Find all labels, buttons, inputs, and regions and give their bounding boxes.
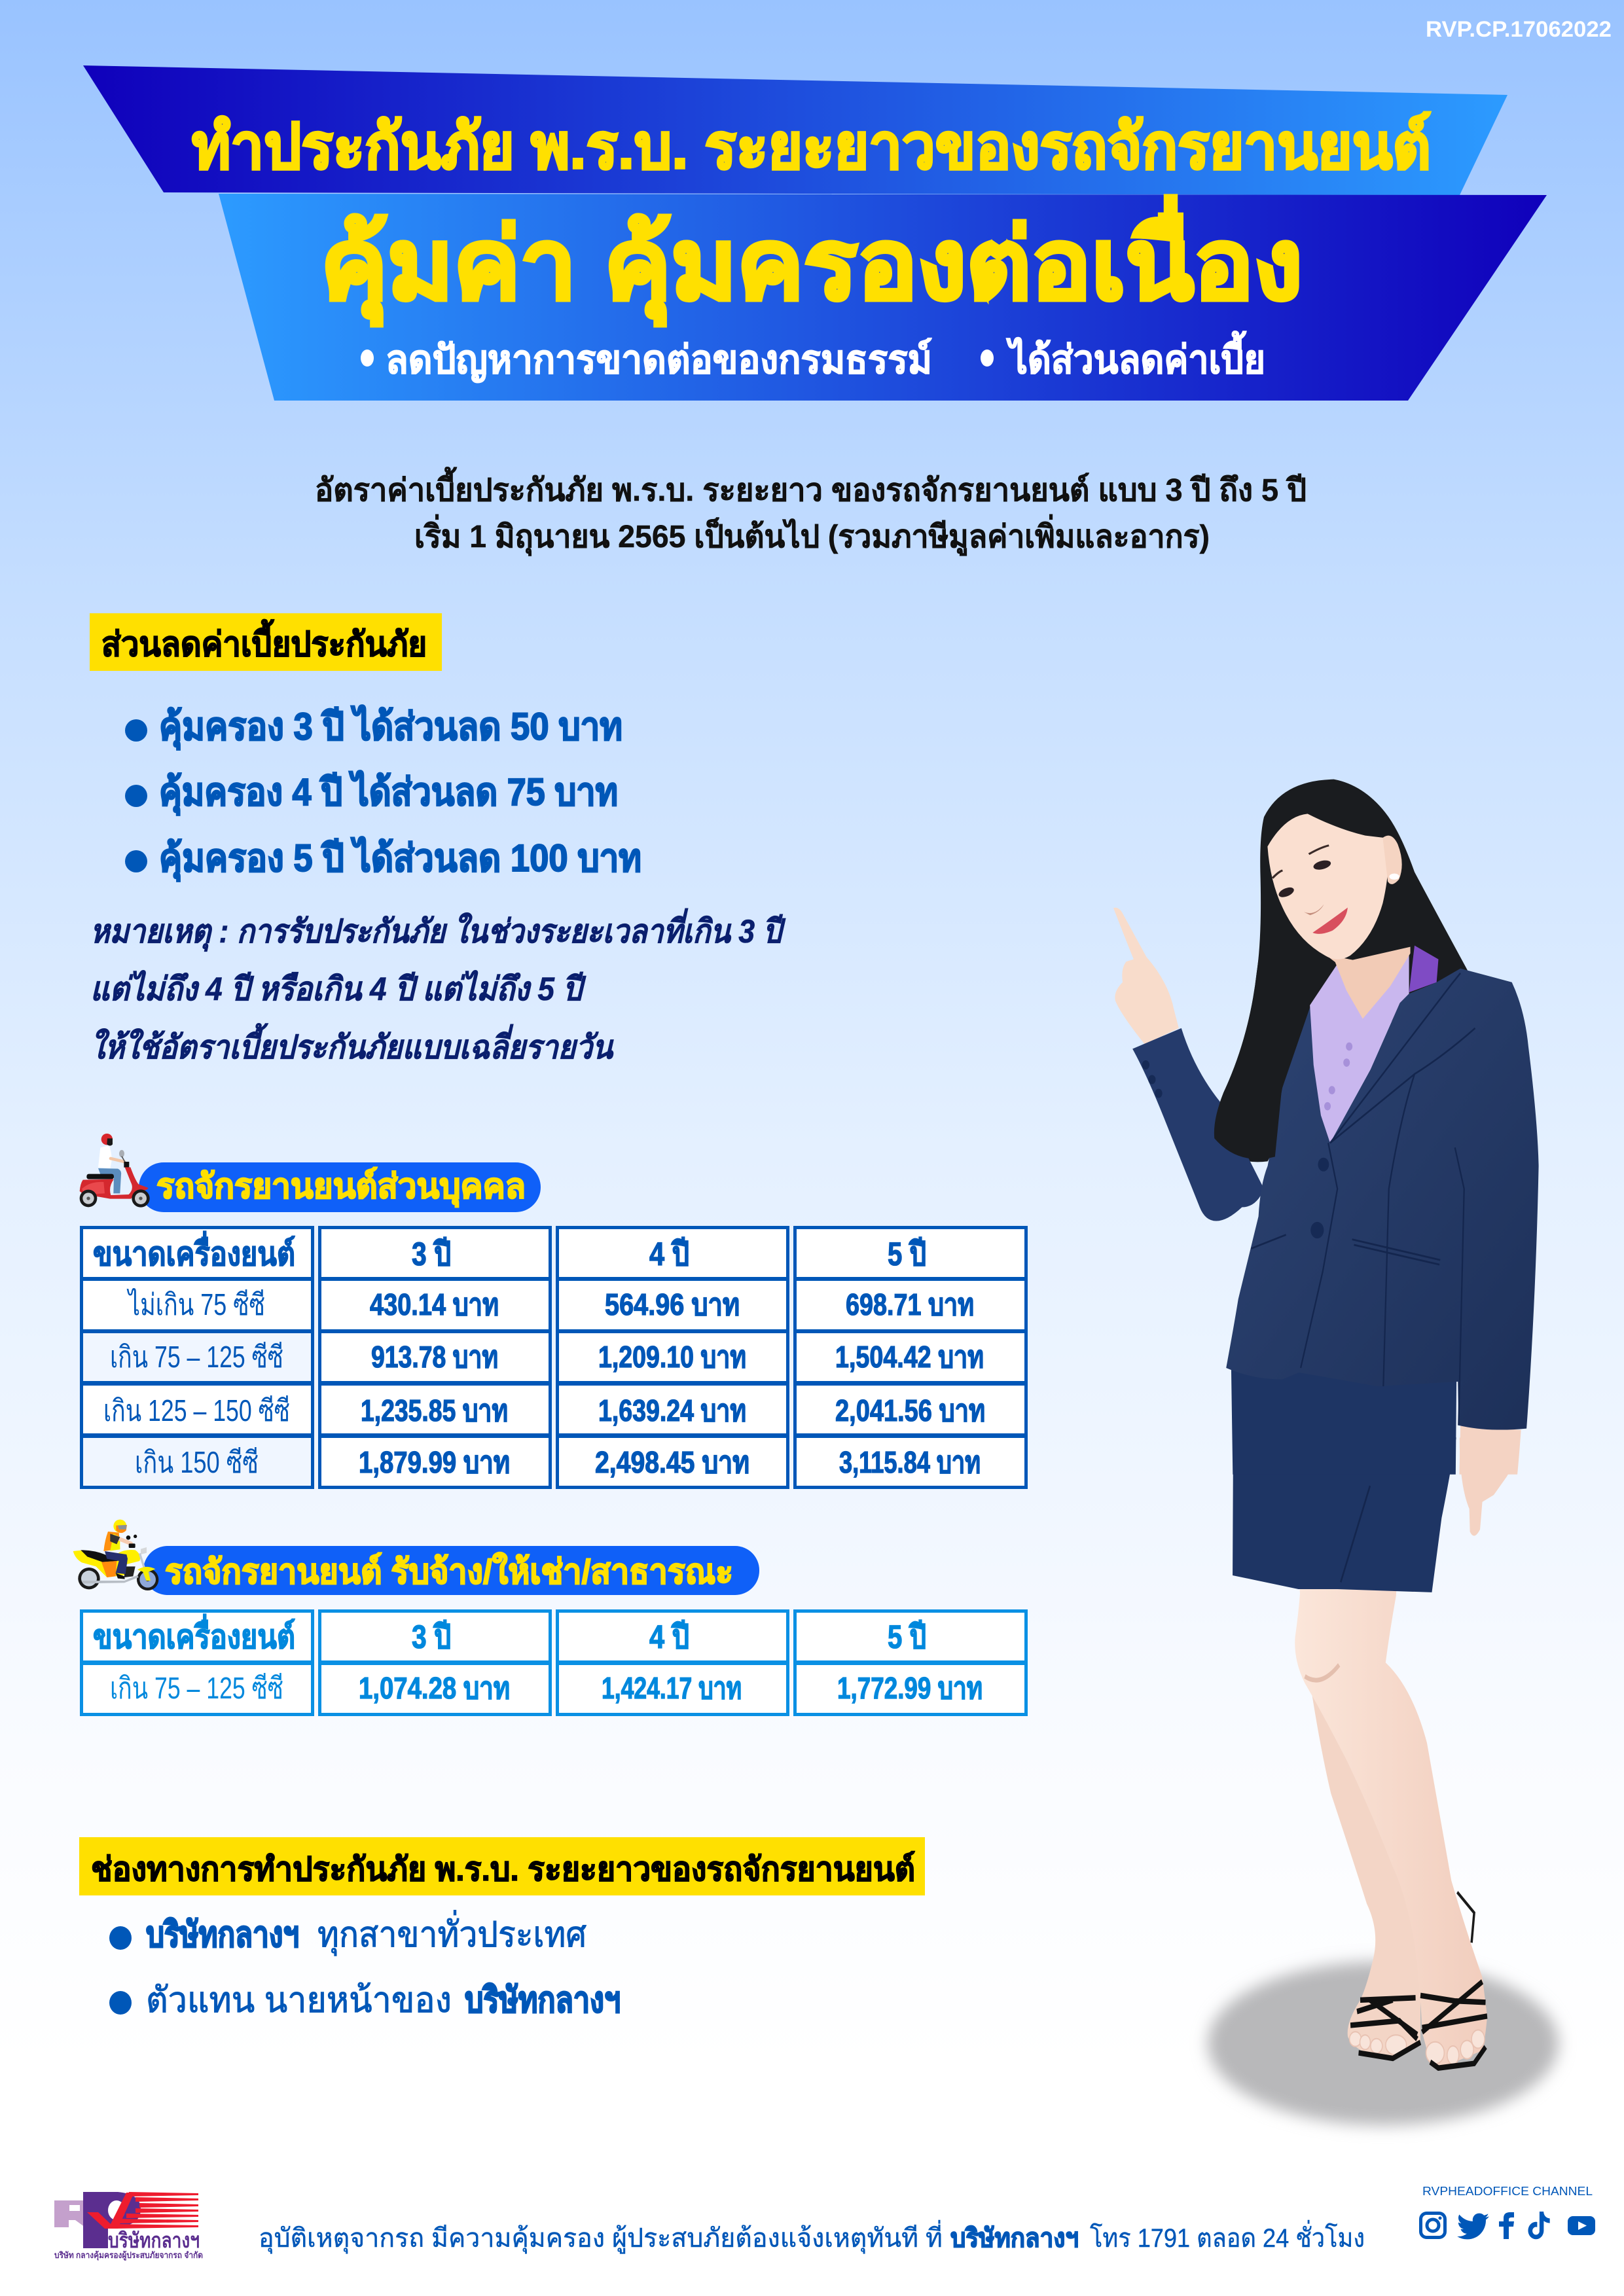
table header row: ขนาดเครื่องยนต์ [93, 1231, 295, 1272]
document code: RVP.CP.17062022 [1426, 17, 1612, 42]
premium values: 3,115.84 บาท [839, 1445, 981, 1479]
heading pill: hire motorcycle: รถจักรยานยนต์ รับจ้าง/ให้เช่า/สาธารณะ [165, 1552, 733, 1591]
intro text [315, 467, 1307, 556]
heading pill: private motorcycle: รถจักรยานยนต์ส่วนบุคคล [156, 1167, 526, 1208]
social channel [1420, 2185, 1595, 2239]
premium values: 564.96 บาท [605, 1287, 740, 1321]
logo: RVP company [54, 2192, 203, 2261]
logo: RVP company: บริษัทกลางฯ [108, 2229, 200, 2252]
nose [1304, 905, 1324, 915]
premium values: 2,498.45 บาท [595, 1445, 749, 1479]
icon: red scooter [80, 1134, 150, 1208]
discount heading: ส่วนลดค่าเบี้ยประกันภัย [101, 619, 427, 664]
channels list: ตัวแทน นายหน้าของ [146, 1981, 452, 2020]
footer message [259, 2220, 1365, 2254]
premium values: 1,504.42 บาท [835, 1340, 984, 1374]
table header row: 5 ปี [888, 1619, 926, 1655]
channel label: RVPHEADOFFICE CHANNEL [1422, 2185, 1593, 2198]
discount list: คุ้มครอง 4 ปี ได้ส่วนลด 75 บาท [159, 770, 618, 816]
legs and sandals [1295, 1568, 1487, 2069]
intro text: เริ่ม 1 มิถุนายน 2565 เป็นต้นไป (รวมภาษีมูลค่าเพิ่มและอากร) [414, 514, 1210, 556]
icon: twitter [1457, 2214, 1489, 2239]
premium values: 913.78 บาท [371, 1340, 498, 1374]
panel: sales channels [79, 1837, 925, 2020]
jacket [1226, 969, 1539, 1430]
discount list: คุ้มครอง 5 ปี ได้ส่วนลด 100 บาท [159, 836, 641, 882]
channels list: บริษัทกลางฯ [465, 1981, 621, 2020]
table header row: 5 ปี [888, 1236, 926, 1272]
engine size labels [103, 1287, 290, 1479]
premium values: 1,772.99 บาท [837, 1671, 983, 1705]
discount heading [90, 613, 442, 671]
note: แต่ไม่ถึง 4 ปี หรือเกิน 4 ปี แต่ไม่ถึง 5 ปี [90, 970, 586, 1007]
note [90, 908, 785, 1066]
premium values: 1,235.85 บาท [361, 1393, 508, 1427]
eyes and brows [1272, 846, 1332, 899]
intro text: อัตราค่าเบี้ยประกันภัย พ.ร.บ. ระยะยาว ของรถจักรยานยนต์ แบบ 3 ปี ถึง 5 ปี [315, 467, 1307, 508]
engine size labels: เกิน 150 ซีซี [135, 1445, 259, 1479]
table: private motorcycle premiums [81, 1228, 1026, 1487]
raised left hand [1113, 908, 1179, 1044]
table header row [93, 1614, 926, 1655]
footer message: บริษัทกลางฯ [950, 2224, 1079, 2253]
panel: private motorcycle rates [80, 1134, 1026, 1487]
engine size labels: ไม่เกิน 75 ซีซี [126, 1287, 265, 1321]
premium values: 1,879.99 บาท [359, 1445, 510, 1479]
engine size labels: เกิน 75 – 125 ซีซี [110, 1340, 283, 1374]
skirt slit [1341, 1486, 1370, 1582]
premium values: 1,209.10 บาท [598, 1340, 746, 1374]
table header row: 4 ปี [649, 1236, 689, 1272]
premium values: 430.14 บาท [370, 1287, 499, 1321]
face [1267, 814, 1388, 960]
premium values: 2,041.56 บาท [835, 1393, 985, 1427]
skirt [1231, 1350, 1457, 1592]
banner: top ribbon [83, 65, 1507, 195]
long hair [1214, 780, 1468, 1162]
panel: discount [90, 613, 785, 1066]
banner: main ribbon [219, 194, 1547, 401]
head [1267, 814, 1411, 1019]
icon: tiktok [1528, 2212, 1550, 2239]
ear [1382, 836, 1402, 884]
table header row: 4 ปี [649, 1619, 689, 1655]
premium values: 1,424.17 บาท [602, 1671, 742, 1705]
icon: instagram [1420, 2214, 1445, 2237]
jacket seams, lapels and pockets [1251, 973, 1475, 1426]
channels heading [79, 1837, 925, 1895]
premium values: 698.71 บาท [846, 1287, 974, 1321]
discount list [125, 705, 641, 882]
floor shadow [1208, 1962, 1559, 2125]
premium values: 1,639.24 บาท [598, 1393, 746, 1427]
footer message: โทร 1791 ตลอด 24 ชั่วโมง [1090, 2220, 1365, 2253]
title line: ทำประกันภัย พ.ร.บ. ระยะยาวของรถจักรยานยนต์ [192, 112, 1431, 182]
banner benefit bullets: ลดปัญหาการขาดต่อของกรมธรรม์ [386, 338, 932, 383]
table header row: 3 ปี [412, 1236, 451, 1272]
person: presenter in navy suit [1113, 780, 1539, 2069]
table header row: 3 ปี [412, 1619, 451, 1655]
right hand pointing down [1459, 1426, 1521, 1536]
banner benefit bullets [361, 331, 1265, 383]
icon: youtube [1568, 2216, 1595, 2235]
channels heading: ช่องทางการทำประกันภัย พ.ร.บ. ระยะยาวของรถจักรยานยนต์ [91, 1851, 915, 1888]
premium values [359, 1287, 985, 1479]
channels list [109, 1910, 621, 2020]
lips [1312, 908, 1348, 934]
note: หมายเหตุ : การรับประกันภัย ในช่วงระยะเวลาที่เกิน 3 ปี [90, 908, 785, 952]
hair over shoulder [1214, 890, 1341, 1159]
logo: RVP company: บริษัท กลางคุ้มครองผู้ประสบภัยจากรถ จำกัด [54, 2250, 203, 2261]
table: hire motorcycle premiums [81, 1611, 1026, 1715]
blouse buttons [1324, 1043, 1352, 1110]
main headline: คุ้มค่า คุ้มครองต่อเนื่อง [321, 196, 1303, 326]
footer message: อุบัติเหตุจากรถ มีความคุ้มครอง ผู้ประสบภัยต้องแจ้งเหตุทันที ที่ [259, 2220, 943, 2254]
banner benefit bullets: ได้ส่วนลดค่าเบี้ย [1005, 331, 1265, 382]
table header row: ขนาดเครื่องยนต์ [93, 1614, 295, 1655]
icon: taxi motorcycle [73, 1520, 158, 1590]
blouse [1310, 955, 1409, 1143]
header banner [83, 65, 1547, 401]
panel: hire motorcycle rates [73, 1520, 1026, 1715]
premium values [359, 1671, 983, 1705]
engine size labels: เกิน 125 – 150 ซีซี [103, 1393, 290, 1427]
purple collar [1409, 946, 1438, 992]
engine size label: เกิน 75 – 125 ซีซี [110, 1671, 283, 1705]
channels list: ทุกสาขาทั่วประเทศ [317, 1910, 586, 1956]
note: ให้ใช้อัตราเบี้ยประกันภัยแบบเฉลี่ยรายวัน [90, 1023, 614, 1066]
earring [1389, 874, 1399, 880]
neck [1325, 947, 1411, 1019]
table header row [93, 1231, 926, 1272]
premium values: 1,074.28 บาท [359, 1671, 510, 1705]
left sleeve [1132, 1028, 1264, 1221]
jacket buttons [1142, 1060, 1329, 1238]
discount list: คุ้มครอง 3 ปี ได้ส่วนลด 50 บาท [159, 705, 623, 751]
channels list: บริษัทกลางฯ [146, 1915, 299, 1954]
icon: facebook [1499, 2212, 1514, 2239]
